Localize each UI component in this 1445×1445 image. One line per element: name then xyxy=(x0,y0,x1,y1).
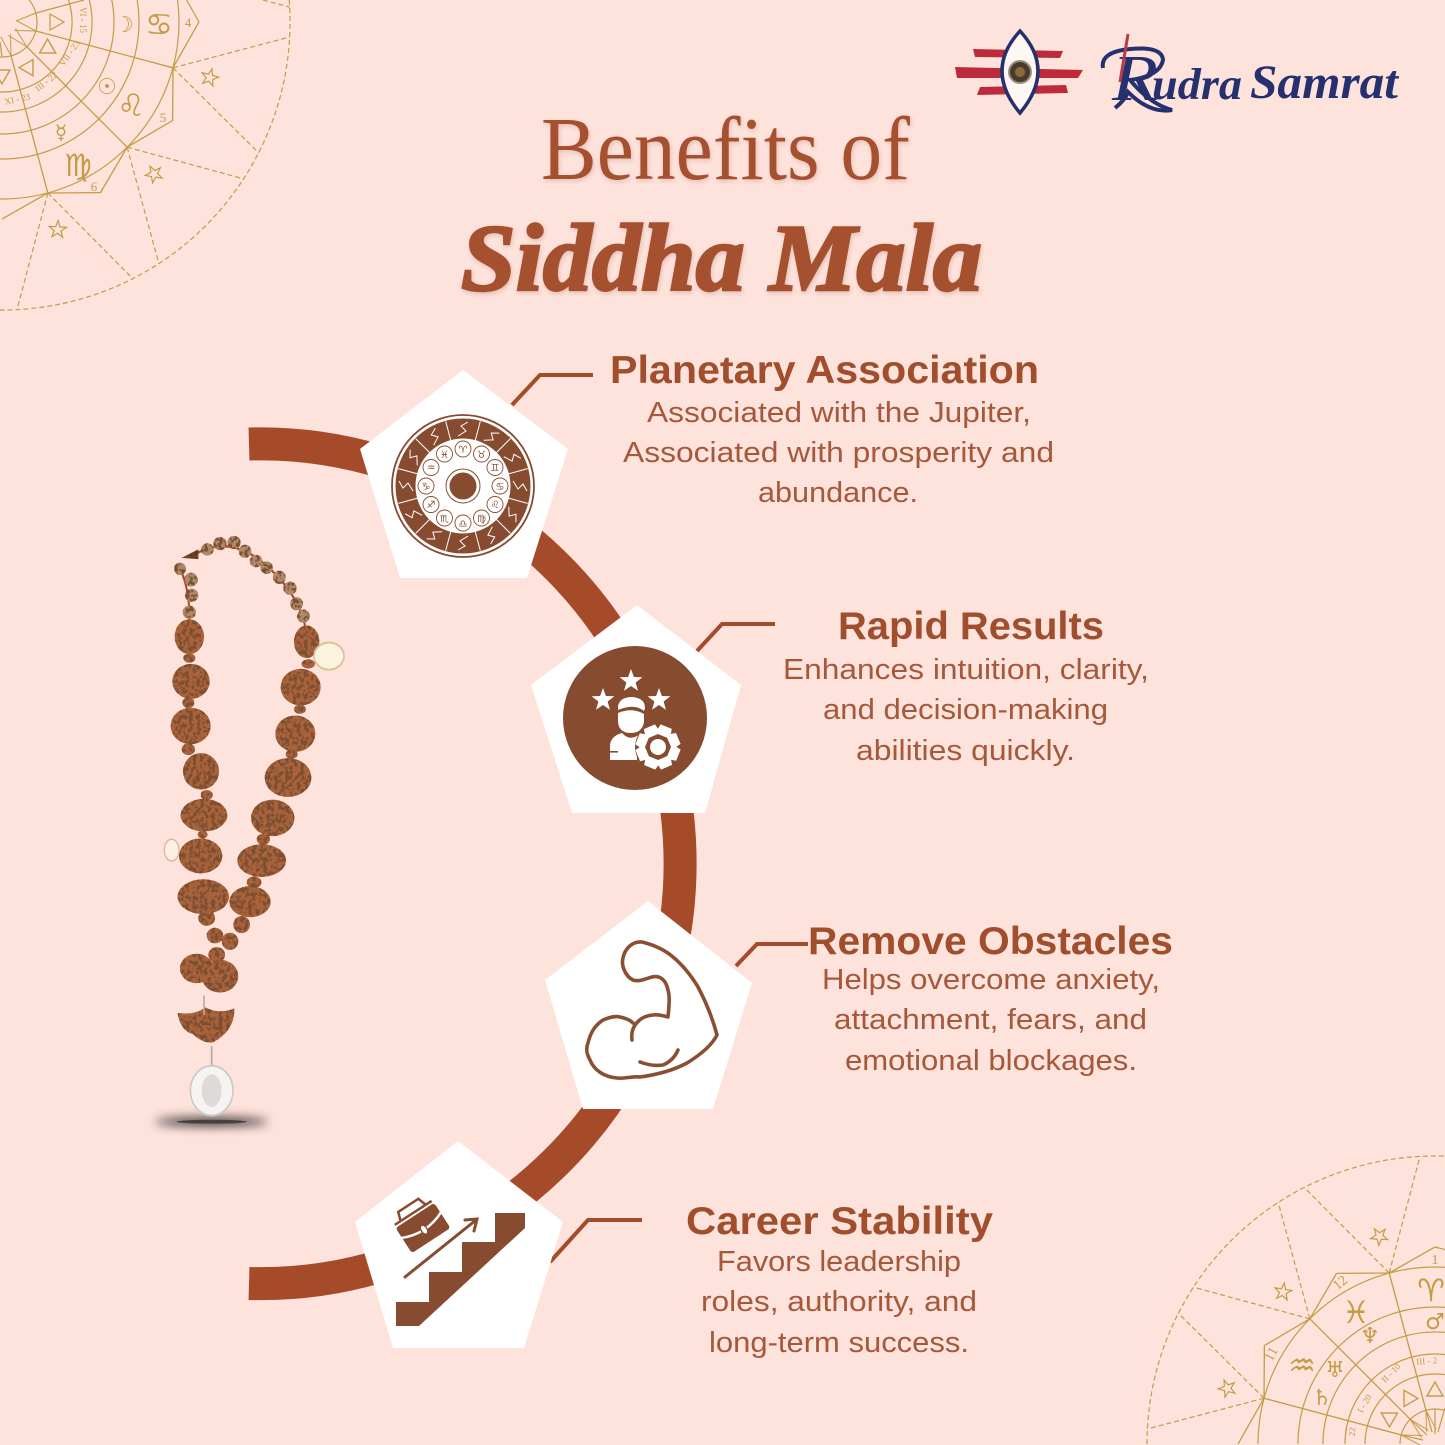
pentagon 4: career stairs icon xyxy=(355,1141,563,1348)
text block: rapid results xyxy=(783,605,1149,767)
pentagon 1: zodiac icon: ♐ xyxy=(427,500,435,511)
zodiac wheel: bottom right: ♒ xyxy=(1288,1348,1316,1384)
logo xyxy=(955,31,1400,115)
pentagon 1: zodiac icon: ♏ xyxy=(440,514,449,525)
text block: planetary association: Associated with prosperity and xyxy=(623,437,1054,469)
zodiac wheel: bottom right: 12 xyxy=(1331,1273,1351,1294)
zodiac wheel: top left: VII - 23 xyxy=(57,38,82,68)
zodiac wheel: bottom right: 11 xyxy=(1262,1345,1282,1364)
title: Benefits of xyxy=(541,100,910,199)
text block: planetary association: abundance. xyxy=(758,477,918,509)
zodiac wheel: bottom right: ♄ xyxy=(1312,1386,1332,1411)
zodiac wheel: bottom right: II - 10 xyxy=(1379,1361,1403,1384)
zodiac wheel: top left: 4 xyxy=(185,15,192,30)
pentagon 1: zodiac icon: ♓ xyxy=(440,450,449,461)
zodiac wheel: top left: 6 xyxy=(91,179,98,194)
pentagon 1: zodiac icon: ♌ xyxy=(491,500,499,511)
pentagon 1: zodiac icon: ♒ xyxy=(427,463,436,474)
zodiac wheel: top left: XI - 23 xyxy=(4,91,32,107)
text block: rapid results: abilities quickly. xyxy=(856,735,1075,767)
pentagon 1: zodiac icon: ♊ xyxy=(491,463,500,474)
zodiac wheel: bottom right: 1 xyxy=(1432,1253,1438,1268)
text block: career stability: Career Stability xyxy=(686,1200,993,1243)
title xyxy=(461,100,982,311)
text block: career stability xyxy=(686,1200,993,1359)
zodiac wheel: bottom right: ♆ xyxy=(1360,1324,1380,1349)
title: Siddha Mala xyxy=(461,205,982,311)
text block: career stability: Favors leadership xyxy=(717,1246,961,1278)
text block: rapid results: Enhances intuition, clarity, xyxy=(783,654,1149,686)
zodiac wheel: top left: 5 xyxy=(160,110,166,125)
zodiac wheel: bottom right: 22 xyxy=(1347,1427,1357,1437)
pentagon 1: zodiac icon: ♉ xyxy=(477,450,486,461)
pentagon 1: zodiac icon: ♈ xyxy=(459,445,468,456)
pentagon 3: muscle icon xyxy=(545,901,752,1109)
zodiac wheel: top left: III - 22 xyxy=(33,70,59,93)
logo: Samrat xyxy=(1250,56,1400,109)
necklace photo illustration xyxy=(155,536,344,1125)
text block: remove obstacles: Remove Obstacles xyxy=(808,920,1173,963)
zodiac wheel: top left: ☉ xyxy=(97,75,117,100)
logo: udra xyxy=(1152,60,1242,109)
zodiac wheel: top left: ♌ xyxy=(117,88,145,124)
zodiac wheel: top left: ☿ xyxy=(55,120,67,144)
pentagon 1: zodiac icon: ♋ xyxy=(496,482,504,493)
leader lines xyxy=(512,375,808,1262)
zodiac wheel: top left: VI - 15 xyxy=(78,7,88,33)
text block: remove obstacles: Helps overcome anxiety, xyxy=(822,964,1160,996)
text block: rapid results: and decision-making xyxy=(823,694,1108,726)
pentagon 1: zodiac icon: ♍ xyxy=(477,514,486,525)
logo: R xyxy=(1111,42,1158,115)
zodiac wheel: bottom right xyxy=(1147,1156,1445,1445)
text block: rapid results: Rapid Results xyxy=(838,605,1104,648)
pentagon 1: zodiac icon: ♎ xyxy=(459,519,468,530)
zodiac wheel: top left: ♋ xyxy=(145,7,173,43)
zodiac wheel: bottom right: ♈ xyxy=(1417,1273,1445,1309)
text block: remove obstacles: emotional blockages. xyxy=(845,1045,1137,1077)
zodiac wheel: bottom right: ♓ xyxy=(1342,1295,1370,1331)
pentagon 1: zodiac icon: ♑ xyxy=(422,482,430,493)
text block: career stability: long-term success. xyxy=(709,1327,969,1359)
text block: planetary association: Planetary Association xyxy=(610,349,1039,392)
zodiac wheel: bottom right: III - 2 xyxy=(1416,1355,1438,1367)
zodiac wheel: top left xyxy=(0,0,290,310)
text block: career stability: roles, authority, and xyxy=(701,1286,977,1318)
text block: remove obstacles xyxy=(808,920,1173,1077)
text block: remove obstacles: attachment, fears, and xyxy=(834,1004,1147,1036)
zodiac wheel: bottom right: I - 20 xyxy=(1355,1392,1374,1414)
zodiac wheel: bottom right: ♅ xyxy=(1325,1358,1345,1383)
pentagon 2: rapid results icon xyxy=(531,605,741,813)
curved connector arc xyxy=(249,444,680,1284)
zodiac wheel: top left: ☽ xyxy=(114,13,134,38)
zodiac wheel: bottom right: ♂ xyxy=(1425,1310,1445,1335)
text block: planetary association xyxy=(610,349,1054,509)
pentagon 1: zodiac icon xyxy=(360,370,568,578)
text block: planetary association: Associated with the Jupiter, xyxy=(647,397,1031,429)
zodiac wheel: top left: ♍ xyxy=(64,148,92,184)
